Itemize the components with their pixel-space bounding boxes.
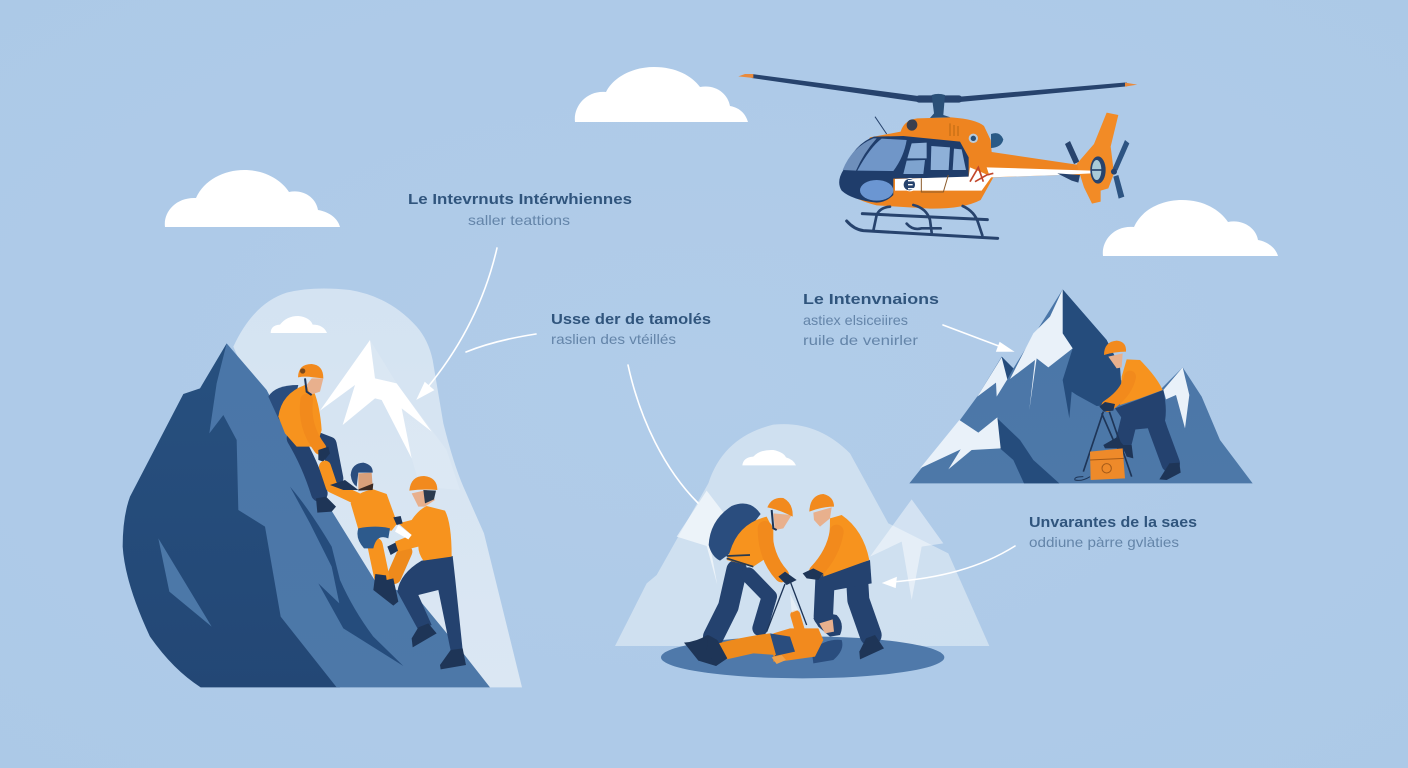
cloud: top centre bbox=[575, 67, 748, 122]
cockpit frame bbox=[839, 136, 969, 203]
text block: centre: raslien des vtéillés bbox=[551, 331, 676, 347]
cloud: left bbox=[165, 170, 340, 227]
scene: rescue on steep mountain bbox=[123, 288, 522, 687]
casualty bbox=[707, 593, 842, 666]
text block: top left bbox=[408, 192, 632, 228]
white stripe bbox=[895, 167, 992, 191]
dark face bbox=[123, 343, 340, 687]
connector: second label bbox=[466, 334, 536, 352]
text block: right upper: Le Intenvnaions bbox=[803, 292, 939, 308]
small cloud bbox=[271, 316, 327, 333]
arrow: to ground scene right bbox=[884, 546, 1015, 587]
text block: top left: saller teattions bbox=[468, 212, 570, 228]
text block: right lower: oddiune pàrre gvlàties bbox=[1029, 534, 1179, 550]
fin bbox=[1077, 113, 1118, 204]
emblems bbox=[903, 134, 993, 191]
tail rotor rear blades bbox=[1065, 141, 1079, 164]
rescuer right bbox=[803, 494, 884, 659]
medical bag bbox=[1075, 412, 1132, 480]
tail strip bbox=[987, 167, 1092, 177]
injured climber bbox=[325, 463, 405, 606]
text block: right lower: Unvarantes de la saes bbox=[1029, 515, 1197, 531]
text block: right upper bbox=[803, 292, 939, 348]
cloud: right bbox=[1103, 200, 1278, 256]
snow peaks bbox=[677, 491, 943, 600]
ground bbox=[661, 636, 944, 678]
arrow: to left mountain bbox=[418, 248, 497, 398]
text block: right upper: astiex elsiceiires bbox=[803, 312, 908, 328]
helicopter bbox=[738, 74, 1137, 238]
text block: top left: Le Intevrnuts Intérwhiennes bbox=[408, 192, 632, 208]
snow peak bbox=[320, 340, 460, 490]
small cloud bbox=[742, 450, 796, 465]
rescuer standing bbox=[393, 476, 466, 669]
connector: to ground scene bbox=[628, 365, 698, 503]
main rotor bbox=[738, 74, 1137, 118]
text block: centre: Usse der de tamolés bbox=[551, 312, 711, 328]
rescuer left bbox=[684, 498, 797, 666]
halo backdrop bbox=[233, 288, 522, 687]
landing skids bbox=[847, 205, 998, 238]
lit face bbox=[209, 343, 490, 687]
text block: centre bbox=[551, 312, 711, 347]
text block: right lower bbox=[1029, 515, 1197, 550]
crevices bbox=[158, 487, 403, 666]
shaded faces bbox=[997, 289, 1122, 483]
mountain range bbox=[909, 289, 1253, 483]
rescuer bbox=[1099, 341, 1181, 480]
snow caps bbox=[920, 289, 1189, 469]
windows bbox=[843, 138, 966, 201]
engine details bbox=[875, 117, 1003, 148]
text block: right upper: ruile de venirler bbox=[803, 332, 918, 348]
scene: casualty on ground bbox=[615, 424, 989, 678]
stretcher ropes bbox=[767, 583, 807, 632]
scene: mountain with medical bag bbox=[909, 289, 1253, 483]
rescuer seated bbox=[268, 364, 336, 513]
fuselage bbox=[843, 117, 1092, 209]
tail rotor bbox=[1090, 140, 1129, 199]
halo backdrop bbox=[615, 424, 989, 646]
arrow: to right mountain bbox=[943, 325, 1012, 351]
